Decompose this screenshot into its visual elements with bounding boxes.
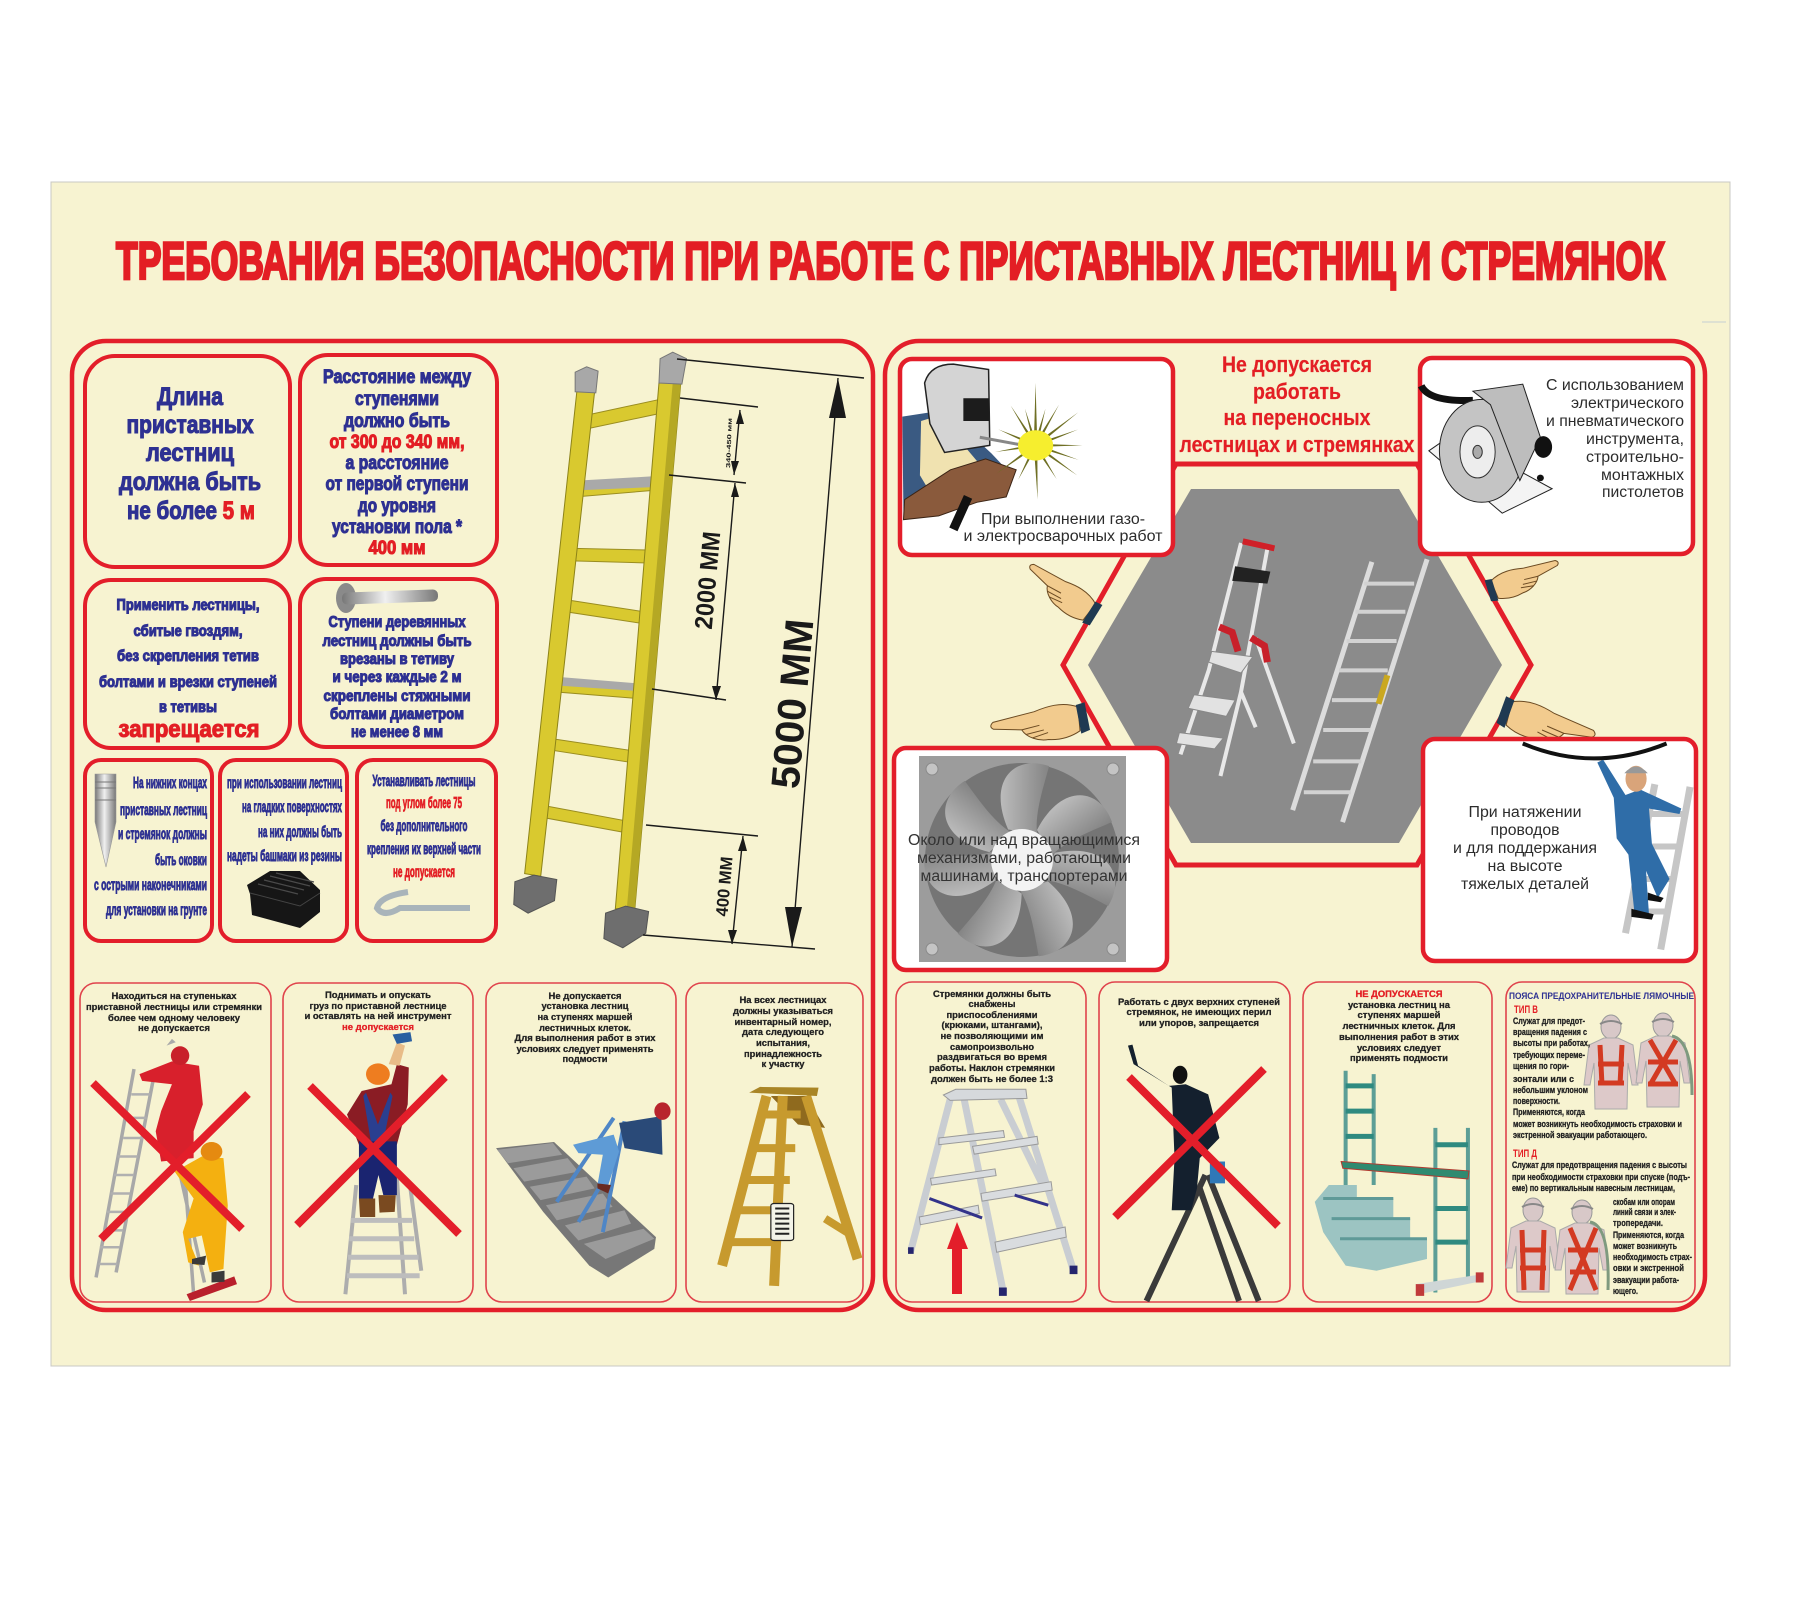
card: ladder length: должна быть: [119, 468, 261, 496]
card: step spacing: от первой ступени: [326, 474, 468, 495]
heading: not allowed: [1180, 352, 1415, 457]
card: wire tension: на высоте: [1488, 858, 1562, 875]
panel: one person on ladder: Находиться на ступеньках: [112, 991, 237, 1002]
panel: safety harnesses: может возникнуть необходимость страховки и: [1513, 1119, 1682, 1130]
illustration: fan: [913, 749, 1129, 962]
panel: top steps without rails: [1099, 982, 1290, 1302]
panel: safety harnesses: ТИП Д: [1513, 1148, 1537, 1160]
card: wooden ladder steps with bolt: скреплены стяжными: [324, 688, 470, 705]
panel: inventory number: к участку: [762, 1059, 805, 1070]
panel: safety harnesses: Служат для предот-: [1513, 1016, 1585, 1027]
panel: safety harnesses: эвакуации работа-: [1613, 1275, 1679, 1286]
card: power tools: пистолетов: [1602, 484, 1684, 501]
card: wooden ladder steps with bolt: лестниц должны быть: [322, 633, 472, 650]
panel: safety harnesses: необходимость страх-: [1613, 1252, 1692, 1263]
panel: not on staircases: лестничных клеток.: [539, 1023, 631, 1034]
panel: safety harnesses: скобам или опорам: [1613, 1197, 1675, 1208]
panel: top steps without rails: стремянок, не имеющих перил: [1126, 1007, 1272, 1018]
card: nailed ladders forbidden: без скрепления тетив: [117, 648, 259, 665]
icon: red up arrow: [947, 1222, 968, 1294]
panel: one person on ladder: [80, 983, 271, 1302]
panel: safety harnesses: овки и экстренной: [1613, 1263, 1684, 1274]
panel: inventory number: должны указываться: [733, 1006, 833, 1017]
harness figures: type D: [1506, 1198, 1609, 1294]
panel: not on staircases: установка лестниц: [542, 1001, 629, 1012]
card: step spacing: Расстояние между: [323, 367, 471, 388]
panel: safety harnesses: линий связи и элек-: [1613, 1207, 1676, 1218]
panel: stepladder requirements: Стремянки должны быть: [933, 989, 1051, 1000]
poster background: [51, 182, 1730, 1366]
panel: safety harnesses: может возникнуть: [1613, 1241, 1677, 1252]
panel: scaffold on staircases: установка лестниц на: [1348, 1000, 1451, 1011]
card: angle limit: не допускается: [393, 864, 455, 881]
label: 2000 mm: 2000 ММ: [690, 530, 726, 630]
panel: safety harnesses: ющего.: [1613, 1286, 1638, 1297]
card: angle limit: Устанавливать лестницы: [372, 773, 476, 790]
panel: inventory number: На всех лестницах: [740, 995, 827, 1006]
ladder diagram: [514, 352, 687, 948]
illustration: scaffold and stairs: [1315, 1071, 1484, 1296]
panel: inventory number: инвентарный номер,: [734, 1017, 832, 1028]
card: step spacing: установки пола *: [332, 517, 462, 538]
card: wire tension: тяжелых деталей: [1461, 876, 1589, 893]
card: rubber shoes: надеты башмаки из резины: [227, 848, 342, 865]
card: sharp tips: для установки на грунте: [106, 902, 207, 919]
card: step spacing: [300, 355, 497, 565]
panel: stepladder requirements: работы. Наклон стремянки: [929, 1063, 1055, 1074]
label: 400 mm: 400 ММ: [712, 856, 737, 917]
card: step spacing: ступенями: [355, 389, 439, 410]
icon: rubber shoe: [247, 871, 320, 928]
card: wooden ladder steps with bolt: врезаны в тетиву: [340, 651, 454, 668]
panel: inventory number: дата следующего: [742, 1027, 824, 1038]
card: welding: и электросварочных работ: [964, 528, 1162, 545]
card: welding: При выполнении газо-: [981, 511, 1145, 528]
panel: scaffold on staircases: НЕ ДОПУСКАЕТСЯ: [1356, 989, 1443, 1000]
panel: safety harnesses: ТИП В: [1514, 1004, 1538, 1016]
card: angle limit: [357, 760, 496, 941]
panel: safety harnesses: зонтали или с: [1513, 1074, 1574, 1085]
card: wire tension: проводов: [1490, 822, 1560, 839]
card: rotating machinery: [894, 748, 1167, 970]
card: step spacing: до уровня: [358, 496, 436, 517]
card: sharp tips: На нижних концах: [133, 775, 207, 792]
card: sharp tips: [85, 760, 212, 941]
heading: not allowed: Не допускается: [1222, 352, 1372, 377]
card: step spacing: должно быть: [344, 411, 450, 432]
panel: stepladder requirements: приспособлениями: [946, 1010, 1038, 1021]
card: power tools: монтажных: [1601, 467, 1684, 484]
card: rotating machinery: механизмами, работающими: [917, 850, 1131, 867]
card: angle limit: под углом более 75: [386, 795, 462, 812]
panel: not on staircases: [486, 983, 676, 1302]
panel: not on staircases: на ступенях маршей: [538, 1012, 633, 1023]
card: wire tension: и для поддержания: [1453, 840, 1597, 857]
card: ladder length: [85, 356, 290, 567]
heading: not allowed: работать: [1253, 379, 1341, 404]
heading: not allowed: лестницах и стремянках: [1180, 432, 1415, 457]
card: sharp tips: и стремянок должны: [118, 826, 207, 843]
panel: scaffold on staircases: условиях следует: [1357, 1043, 1441, 1054]
panel: inventory number: испытания,: [756, 1038, 810, 1049]
panel: scaffold on staircases: [1303, 982, 1492, 1302]
card: wooden ladder steps with bolt: не менее 8 мм: [351, 724, 443, 741]
card: power tools: и пневматического: [1546, 413, 1684, 430]
card: ladder length: приставных: [126, 411, 254, 439]
card: sharp tips: с острыми наконечниками: [94, 877, 207, 894]
illustration: wooden stepladder with tag: [722, 1087, 858, 1286]
card: angle limit: крепления их верхней части: [367, 841, 481, 858]
panel: stepladder requirements: должен быть не более 1:3: [931, 1074, 1053, 1085]
panel: cargo on ladder: и оставлять на ней инструмент: [304, 1011, 452, 1022]
card: rubber shoes: [220, 760, 347, 941]
card: ladder length: лестниц: [146, 439, 235, 467]
illustration: stepladder and ladder: [1176, 541, 1427, 822]
illustration: worker on ladder pulling wire: [1523, 743, 1690, 949]
panel: stepladder requirements: раздвигаться во время: [937, 1052, 1047, 1063]
card: wooden ladder steps with bolt: болтами диаметром: [330, 706, 464, 723]
illustration: falling worker on stairs: [496, 1102, 671, 1277]
panel: one person on ladder: приставной лестницы или стремянки: [86, 1002, 262, 1013]
panel: cargo on ladder: Поднимать и опускать: [325, 990, 431, 1001]
panel: safety harnesses: [1506, 982, 1695, 1302]
panel: not on staircases: Для выполнения работ в этих: [514, 1033, 656, 1044]
card: nailed ladders forbidden: болтами и врезки ступеней: [99, 674, 277, 691]
illustration: two workers on ladder: [96, 1039, 237, 1301]
card: wire tension: [1423, 739, 1696, 961]
card: rubber shoes: на них должны быть: [258, 824, 342, 841]
card: step spacing: от 300 до 340 мм,: [330, 432, 464, 453]
panel: safety harnesses: Служат для предотвращения падения с высоты: [1512, 1160, 1687, 1171]
heading: not allowed: на переносных: [1224, 405, 1371, 430]
panel: stepladder requirements: не позволяющими им: [940, 1031, 1044, 1042]
card: step spacing: 400 мм: [368, 538, 426, 559]
card: sharp tips: приставных лестниц: [120, 802, 207, 819]
panel: scaffold on staircases: выполнения работ в этих: [1339, 1032, 1460, 1043]
card: nailed ladders forbidden: запрещается: [118, 716, 260, 743]
callout hand: bottom right: [1495, 696, 1599, 753]
panel: not on staircases: подмости: [562, 1054, 608, 1065]
callout hand: top left: [1020, 555, 1104, 630]
card: nailed ladders forbidden: [85, 580, 290, 748]
panel: stepladder requirements: самопроизвольно: [950, 1042, 1034, 1053]
panel: safety harnesses: тропередачи.: [1613, 1218, 1663, 1229]
panel: cargo on ladder: не допускается: [342, 1022, 414, 1033]
label: 5000 mm: 5000 ММ: [764, 617, 822, 790]
card: power tools: строительно-: [1586, 449, 1684, 466]
panel: right section: [885, 341, 1705, 1310]
card: power tools: [1420, 358, 1693, 554]
card: power tools: С использованием: [1546, 377, 1684, 394]
card: wire tension: При натяжении: [1468, 804, 1582, 821]
card: nailed ladders forbidden: в тетивы: [159, 699, 217, 716]
illustration: silhouette on stepladder: [1128, 1045, 1259, 1301]
card: wooden ladder steps with bolt: и через каждые 2 м: [332, 669, 462, 686]
card: wooden ladder steps with bolt: [300, 579, 497, 747]
panel: cargo on ladder: груз по приставной лестнице: [310, 1001, 446, 1012]
illustration: welder: [902, 364, 1083, 529]
card: nailed ladders forbidden: Применить лестницы,: [116, 597, 260, 614]
card: rotating machinery: Около или над вращающимися: [908, 832, 1140, 849]
illustration: circular saw: [1421, 384, 1552, 513]
card: nailed ladders forbidden: сбитые гвоздям,: [134, 623, 242, 640]
panel: safety harnesses: экстренной эвакуации работающего.: [1513, 1130, 1647, 1141]
card: rubber shoes: на гладких поверхностях: [242, 799, 342, 816]
card: power tools: электрического: [1571, 395, 1684, 412]
card: ladder length: Длина: [157, 383, 224, 411]
panel: stepladder requirements: (крюками, штангами),: [942, 1020, 1042, 1031]
icon: red cross: [297, 1077, 459, 1234]
card: step spacing: а расстояние: [346, 453, 448, 474]
panel: scaffold on staircases: ступенях маршей: [1358, 1010, 1441, 1021]
card: ladder length: не более 5 м: [127, 497, 255, 525]
callout hand: top right: [1483, 551, 1564, 606]
panel: safety harnesses: Применяются, когда: [1613, 1230, 1685, 1241]
icon: bolt: [336, 583, 438, 613]
dimension lines: [643, 359, 864, 949]
harness figures: type B: [1584, 1013, 1692, 1109]
panel: safety harnesses: Применяются, когда: [1513, 1107, 1586, 1118]
illustration: aluminium stepladder with arrow: [908, 1089, 1077, 1296]
icon: red cross: [1115, 1069, 1278, 1226]
panel: safety harnesses: щения по гори-: [1513, 1061, 1569, 1072]
panel: cargo on ladder: [283, 983, 473, 1302]
icon: red cross: [93, 1083, 248, 1239]
panel: safety harnesses: поверхности.: [1513, 1096, 1560, 1107]
panel: not on staircases: Не допускается: [548, 991, 622, 1002]
panel: safety harnesses: ПОЯСА ПРЕДОХРАНИТЕЛЬНЫЕ ЛЯМОЧНЫЕ: [1509, 991, 1694, 1002]
panel: left section: [72, 341, 873, 1310]
label: 340-450 mm: 340-450 мм: [726, 417, 734, 468]
hexagon frame: [1063, 464, 1531, 865]
illustration: painter on ladder: [345, 1032, 421, 1294]
panel: safety harnesses: еме) по вертикальным навесным лестницам,: [1512, 1183, 1675, 1194]
panel: scaffold on staircases: применять подмости: [1350, 1053, 1448, 1064]
panel: one person on ladder: не допускается: [138, 1023, 210, 1034]
panel: one person on ladder: более чем одному человеку: [108, 1013, 241, 1024]
panel: top steps without rails: Работать с двух верхних ступеней: [1118, 997, 1280, 1008]
panel: stepladder requirements: [896, 982, 1086, 1302]
panel: safety harnesses: при необходимости страховки при спуске (подъ-: [1512, 1172, 1690, 1183]
card: rubber shoes: при использовании лестниц: [227, 775, 342, 792]
panel: scaffold on staircases: лестничных клеток. Для: [1342, 1021, 1456, 1032]
card: power tools: инструмента,: [1586, 431, 1684, 448]
card: sharp tips: быть оковки: [155, 852, 207, 869]
panel: safety harnesses: небольшим уклоном: [1513, 1085, 1588, 1096]
panel: not on staircases: условиях следует применять: [516, 1044, 654, 1055]
panel: top steps without rails: или упоров, запрещается: [1139, 1018, 1259, 1029]
panel: safety harnesses: требующих переме-: [1513, 1050, 1585, 1061]
panel: stepladder requirements: снабжены: [968, 999, 1016, 1010]
panel: inventory number: [686, 983, 863, 1302]
panel: safety harnesses: высоты при работах,: [1513, 1038, 1590, 1049]
icon: hook: [377, 892, 470, 913]
card: angle limit: без дополнительного: [380, 818, 468, 835]
card: welding: [900, 359, 1173, 555]
card: rotating machinery: машинами, транспортерами: [920, 868, 1128, 885]
grey hexagon: [1088, 489, 1502, 843]
icon: metal spike: [95, 774, 116, 867]
card: wooden ladder steps with bolt: Ступени деревянных: [328, 614, 466, 631]
panel: inventory number: принадлежность: [744, 1049, 822, 1060]
callout hand: bottom left: [989, 702, 1091, 745]
panel: safety harnesses: вращения падения с: [1513, 1027, 1587, 1038]
